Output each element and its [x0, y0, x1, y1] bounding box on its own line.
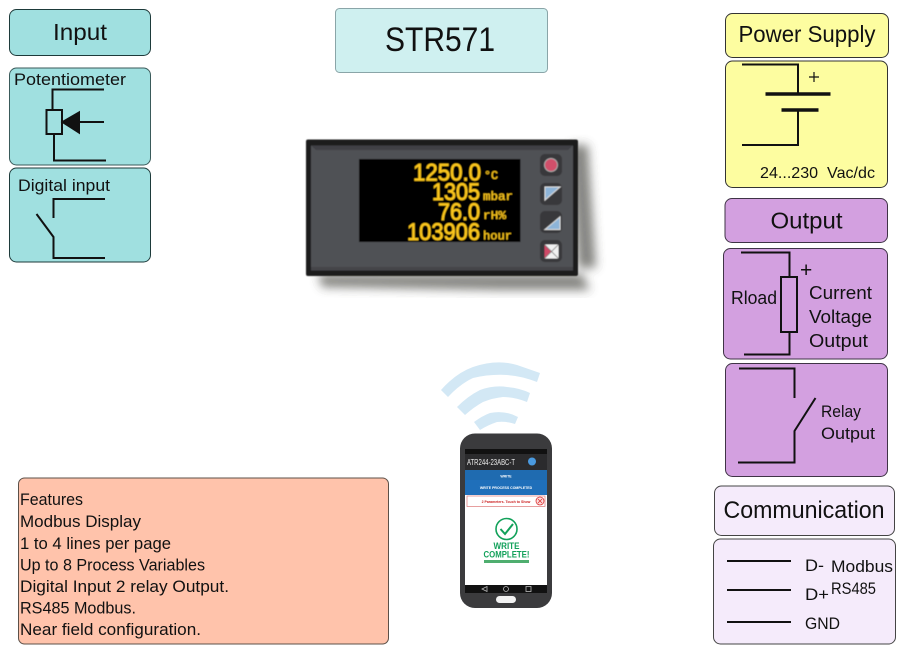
display screen: 1305 [432, 179, 480, 206]
icon: battery symbol [742, 64, 830, 145]
display screen: hour [483, 230, 512, 244]
device: STR571 panel display [306, 140, 596, 290]
phone screen: 2 Parameters. Touch to Show [482, 500, 531, 504]
wiring lines [727, 561, 791, 622]
title [336, 8, 548, 72]
panel: relay output [726, 364, 888, 476]
panel: communication wiring: D- [805, 556, 824, 575]
display screen: 103906 [407, 219, 480, 246]
panel: communication wiring [714, 539, 896, 644]
output heading [725, 198, 888, 242]
panel: digital input [10, 168, 150, 262]
panel: relay output: Output [821, 424, 875, 443]
display screen: mbar [483, 190, 513, 204]
panel: relay output: Relay [821, 402, 861, 421]
panel: potentiometer input [10, 68, 150, 165]
icon: potentiometer symbol [46, 90, 106, 160]
phone screen: WRITE [500, 474, 512, 478]
button: cancel [540, 240, 562, 262]
panel: features: Up to 8 Process Variables [20, 556, 205, 574]
display screen: 1250.0 [413, 160, 481, 186]
panel: current voltage output: Current [809, 283, 872, 303]
display screen [359, 159, 520, 246]
phone home button [496, 596, 516, 603]
display screen: °C [484, 169, 498, 183]
panel: potentiometer input: Potentiometer [14, 70, 126, 89]
power supply heading: Power Supply [738, 21, 876, 47]
panel: features: Features [20, 490, 83, 509]
panel: features: Near field configuration. [20, 620, 201, 639]
input heading [10, 10, 150, 56]
input heading: Input [53, 19, 108, 45]
device shadow [318, 145, 596, 290]
phone with app screen [460, 434, 552, 608]
panel: current voltage output: Voltage [809, 307, 872, 327]
panel: features: Modbus Display [20, 512, 141, 531]
icon: digital input switch [36, 199, 105, 258]
panel: digital input: Digital input [18, 176, 110, 195]
panel: features: RS485 Modbus. [20, 598, 136, 618]
icon: load resistor [741, 252, 797, 354]
panel: power supply [726, 61, 888, 188]
icon: check mark [496, 518, 517, 540]
panel: current voltage output: Output [809, 331, 868, 351]
panel: current voltage output: + [800, 259, 812, 282]
panel: power supply: 24...230 Vac/dc [760, 165, 875, 182]
button: up [540, 183, 562, 205]
phone screen [465, 449, 547, 593]
panel: communication wiring: RS485 [831, 579, 876, 598]
phone screen: COMPLETE! [484, 550, 530, 560]
power supply heading [726, 14, 888, 58]
communication heading [714, 486, 894, 536]
panel: communication wiring: GND [805, 614, 840, 633]
panel: features [18, 478, 388, 644]
title: STR571 [385, 21, 495, 59]
panel: communication wiring: Modbus [831, 557, 893, 576]
icon: wireless signal arcs [441, 362, 540, 430]
panel: current voltage output: Rload [731, 288, 777, 308]
icon: relay switch [738, 368, 816, 462]
phone screen: WRITE PROCESS COMPLETED [480, 486, 533, 490]
button: record [540, 154, 562, 176]
button: down [540, 211, 562, 233]
panel: features: 1 to 4 lines per page [20, 534, 171, 553]
panel: communication wiring: D+ [805, 585, 829, 604]
display screen: 76.0 [438, 199, 480, 226]
phone screen: ATR244-23ABC-T [467, 458, 515, 467]
display screen: rH% [483, 209, 507, 223]
output heading: Output [770, 208, 843, 234]
panel: current voltage output [724, 248, 888, 359]
panel: features: Digital Input 2 relay Output. [20, 577, 229, 596]
communication heading: Communication [724, 497, 884, 524]
phone screen: WRITE [494, 541, 520, 551]
